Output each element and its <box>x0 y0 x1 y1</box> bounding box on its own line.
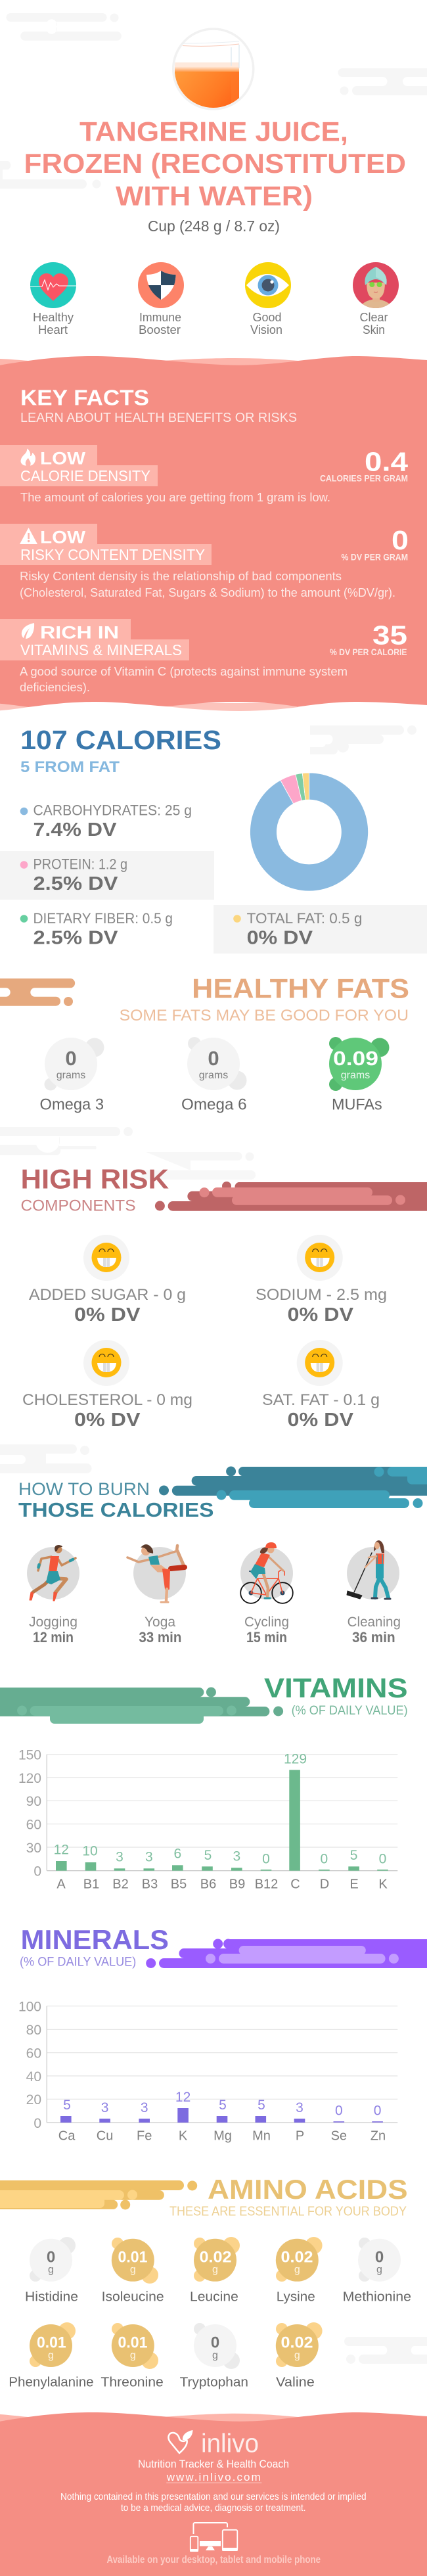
fact: risky content density: LOW <box>40 527 86 547</box>
amino: threonine: 0.01 <box>118 2334 147 2352</box>
benefit: good vision <box>245 262 291 336</box>
bar chart: vitamins: 0 <box>379 1851 386 1866</box>
label: Clear <box>360 311 388 324</box>
bar chart: vitamins: 3 <box>145 1850 153 1865</box>
fat: mufas <box>329 1037 389 1114</box>
bar chart: vitamins: 150 <box>18 1748 41 1762</box>
benefit: clear skin <box>353 262 399 336</box>
bar chart: vitamins: 5 <box>204 1848 212 1863</box>
label: Booster <box>139 323 181 336</box>
serving size: Cup (248 g / 8.7 oz) <box>148 218 280 235</box>
amino: threonine <box>101 2323 164 2390</box>
fat: omega 3: 0 <box>65 1047 77 1070</box>
title: WITH WATER) <box>116 180 313 212</box>
fact: vitamins and minerals: A good source of Vitamin C (protects against immune system <box>20 665 348 678</box>
heading: vitamins: VITAMINS <box>264 1672 408 1703</box>
fat: omega 3: grams <box>56 1070 85 1081</box>
amino: threonine: g <box>130 2350 136 2361</box>
bar chart: minerals: 0 <box>374 2103 381 2118</box>
heading: calories: 107 CALORIES <box>20 725 221 755</box>
amino: phenylalanine: 0.01 <box>37 2334 66 2352</box>
amino: lysine <box>276 2237 323 2305</box>
risk: saturated fat: 0% DV <box>288 1410 354 1431</box>
icon: warning triangle <box>20 528 37 544</box>
exercise: yoga: 33 min <box>139 1629 181 1645</box>
bar chart: vitamins: C <box>290 1877 300 1891</box>
amino: valine <box>276 2322 323 2390</box>
banner: burn <box>159 1467 427 1508</box>
exercise: jogging <box>27 1545 79 1645</box>
legend: dietary fiber: 2.5% DV <box>33 928 118 949</box>
fact: calorie density: 0.4 <box>365 447 408 477</box>
bar chart: minerals: 3 <box>296 2100 303 2115</box>
label <box>250 311 282 336</box>
fact: risky content density: (Cholesterol, Saturated Fat, Sugars & Sodium) to the amount (%DV/gr). <box>20 586 395 599</box>
exercise: cleaning: Cleaning <box>348 1615 401 1630</box>
risk: cholesterol <box>22 1340 192 1431</box>
legend: carbohydrates: 7.4% DV <box>33 819 117 840</box>
heading: minerals <box>20 1924 169 1969</box>
fat: mufas: MUFAs <box>332 1096 382 1114</box>
label <box>360 311 388 336</box>
exercise: cycling: 15 min <box>246 1629 287 1645</box>
legend: total fat: 0% DV <box>247 928 313 949</box>
bar chart: vitamins: E <box>349 1877 359 1891</box>
icon: flame <box>21 448 35 466</box>
bar chart: vitamins: 90 <box>26 1794 41 1809</box>
bar chart: vitamins: 12 <box>54 1843 69 1858</box>
risk: cholesterol: CHOLESTEROL - 0 mg <box>22 1391 192 1409</box>
amino: leucine <box>190 2237 240 2305</box>
amino: leucine: Leucine <box>190 2290 238 2305</box>
chart: macronutrient donut <box>250 773 369 891</box>
bar chart: minerals: Cu <box>97 2129 113 2144</box>
bar chart: minerals: Mn <box>252 2129 271 2144</box>
risk: saturated fat <box>262 1340 380 1431</box>
legend: protein <box>0 851 214 900</box>
benefit: healthy heart <box>30 262 76 336</box>
tagline: Nutrition Tracker & Health Coach <box>138 2458 289 2470</box>
label: Good <box>252 311 281 324</box>
banner: healthy fats <box>0 978 75 1006</box>
risk: sodium <box>256 1235 387 1325</box>
disclaimer <box>60 2491 367 2514</box>
fat: mufas: grams <box>341 1070 370 1081</box>
icon: grinning face <box>305 1243 334 1272</box>
bar chart: vitamins: 30 <box>26 1841 41 1856</box>
amino: leucine: g <box>212 2265 218 2276</box>
bar chart: minerals: 12 <box>175 2090 191 2105</box>
heading: vitamins: (% OF DAILY VALUE) <box>292 1704 408 1718</box>
legend: protein: 2.5% DV <box>33 873 118 894</box>
icon: face with towel <box>353 262 399 310</box>
fat: omega 6: grams <box>199 1070 228 1081</box>
legend: total fat <box>214 905 427 954</box>
amino: threonine: Threonine <box>101 2376 164 2390</box>
bar chart: vitamins <box>18 1748 397 1891</box>
heading: how to burn: HOW TO BURN <box>18 1479 150 1499</box>
legend: carbohydrates <box>20 802 192 840</box>
risk: sodium: 0% DV <box>288 1304 354 1325</box>
risk: cholesterol: 0% DV <box>74 1410 141 1431</box>
amino: methionine: 0 <box>375 2248 384 2266</box>
icon: leaf <box>22 623 34 639</box>
bar chart: minerals: Mg <box>214 2129 232 2144</box>
disclaimer: Nothing contained in this presentation and our services is intended or implied <box>60 2491 367 2502</box>
risk: added sugar: ADDED SUGAR - 0 g <box>29 1286 186 1304</box>
fact: risky content density: % DV PER GRAM <box>342 552 408 563</box>
heading: minerals: MINERALS <box>21 1924 169 1955</box>
bar chart: vitamins: 3 <box>233 1849 240 1864</box>
label: Immune <box>139 311 181 324</box>
fact: calorie density: CALORIES PER GRAM <box>320 473 408 484</box>
icon: yoga pose <box>127 1544 185 1602</box>
icon: shield <box>138 262 184 308</box>
banner dot <box>64 997 73 1006</box>
amino: isoleucine: 0.01 <box>118 2248 147 2266</box>
amino: leucine: 0.02 <box>200 2248 231 2266</box>
fact: vitamins and minerals: 35 <box>372 620 407 651</box>
amino: tryptophan <box>180 2323 248 2390</box>
amino: methionine: Methionine <box>343 2290 411 2305</box>
bar chart: vitamins: 0 <box>34 1864 41 1879</box>
fat: mufas: 0.09 <box>333 1047 378 1070</box>
fact: risky content density <box>0 524 409 599</box>
heading: healthy fats: SOME FATS MAY BE GOOD FOR YOU <box>120 1007 409 1024</box>
exercise: jogging: Jogging <box>29 1615 78 1630</box>
heading: healthy fats: HEALTHY FATS <box>192 973 409 1004</box>
bar chart: minerals: 60 <box>26 2046 41 2061</box>
bar chart: minerals: 3 <box>101 2100 108 2115</box>
fact: risky content density: RISKY CONTENT DENSITY <box>20 546 205 563</box>
bar chart: minerals <box>18 1999 397 2144</box>
title: FROZEN (RECONSTITUTED <box>24 148 406 179</box>
bar chart: minerals: 80 <box>26 2023 41 2038</box>
bar chart: vitamins: B2 <box>112 1877 129 1891</box>
amino: phenylalanine <box>9 2322 94 2390</box>
fact: risky content density: 0 <box>392 525 409 555</box>
banner: minerals <box>146 1939 427 1968</box>
fact: risky content density: Risky Content density is the relationship of bad components <box>20 570 342 583</box>
icon: inlivo heart logo <box>168 2430 193 2453</box>
amino: histidine <box>25 2237 78 2305</box>
fact: calorie density: The amount of calories you are getting from 1 gram is low. <box>20 491 330 504</box>
heading: high risk <box>21 1164 169 1215</box>
bar chart: minerals: Fe <box>137 2129 152 2144</box>
amino: isoleucine: g <box>130 2265 136 2276</box>
bar chart: vitamins: 60 <box>26 1818 41 1832</box>
amino: tryptophan: Tryptophan <box>180 2376 248 2390</box>
amino: methionine <box>343 2238 411 2305</box>
amino: tryptophan: 0 <box>211 2334 219 2352</box>
risk: saturated fat: SAT. FAT - 0.1 g <box>262 1391 380 1409</box>
heading: key facts: KEY FACTS <box>20 385 149 410</box>
heading: key facts <box>20 385 297 425</box>
bar chart: vitamins: 129 <box>284 1751 307 1766</box>
risk: added sugar: 0% DV <box>74 1304 141 1325</box>
risk: added sugar <box>29 1235 186 1325</box>
fact: calorie density: CALORIE DENSITY <box>20 467 150 484</box>
heading: how to burn <box>18 1479 214 1521</box>
bar chart: minerals: 20 <box>26 2092 41 2107</box>
bar chart: minerals: 100 <box>18 1999 41 2015</box>
benefit: immune booster <box>138 262 184 336</box>
risk: sodium: SODIUM - 2.5 mg <box>256 1286 387 1304</box>
exercise: jogging: 12 min <box>33 1629 74 1645</box>
fact: vitamins and minerals: RICH IN <box>40 623 119 643</box>
fact: calorie density: LOW <box>40 448 86 468</box>
bar chart: minerals: 40 <box>26 2069 41 2084</box>
bar chart: vitamins: B6 <box>200 1877 216 1891</box>
bar chart: minerals: 0 <box>335 2103 343 2118</box>
bar chart: minerals: 3 <box>141 2100 148 2115</box>
heading: amino acids: THESE ARE ESSENTIAL FOR YOUR BODY <box>169 2205 407 2219</box>
bar chart: minerals: 5 <box>258 2098 265 2113</box>
amino: valine: 0.02 <box>281 2334 313 2352</box>
bar chart: minerals: K <box>179 2129 188 2144</box>
label: Vision <box>250 323 282 336</box>
bar chart: vitamins: 0 <box>321 1851 328 1866</box>
bar chart: minerals: 0 <box>34 2116 41 2131</box>
bar chart: vitamins: B9 <box>229 1877 245 1891</box>
bar chart: minerals: Zn <box>371 2129 386 2144</box>
bar chart: vitamins: B5 <box>171 1877 187 1891</box>
legend: carbohydrates: CARBOHYDRATES: 25 g <box>33 802 192 819</box>
fact: vitamins and minerals <box>0 619 407 694</box>
availability note: Available on your desktop, tablet and mobile phone <box>106 2554 321 2565</box>
amino: tryptophan: g <box>212 2350 218 2361</box>
heading: key facts: LEARN ABOUT HEALTH BENEFITS OR RISKS <box>20 411 297 425</box>
label <box>33 311 74 336</box>
amino: isoleucine: Isoleucine <box>102 2290 164 2305</box>
bar chart: vitamins: B1 <box>83 1877 99 1891</box>
label: Skin <box>363 323 385 336</box>
logo wordmark: inlivo <box>201 2429 259 2458</box>
bar chart: vitamins: B3 <box>142 1877 158 1891</box>
bar chart: minerals: Ca <box>58 2129 76 2144</box>
label: Healthy <box>33 311 74 324</box>
heading: minerals: (% OF DAILY VALUE) <box>20 1956 136 1969</box>
heading: calories <box>20 725 221 776</box>
amino: phenylalanine: Phenylalanine <box>9 2376 94 2390</box>
amino: methionine: g <box>376 2265 382 2276</box>
amino: histidine: 0 <box>47 2248 55 2266</box>
title: TANGERINE JUICE, <box>79 116 348 147</box>
panel: footer <box>0 2412 427 2576</box>
icon: grinning face <box>92 1243 121 1272</box>
icon: eye <box>245 262 291 308</box>
bar chart: vitamins: 5 <box>350 1848 357 1863</box>
fact: vitamins and minerals: % DV PER CALORIE <box>330 647 407 657</box>
bar chart: vitamins: K <box>378 1877 388 1891</box>
heading: vitamins <box>264 1672 408 1718</box>
bar chart: vitamins: A <box>56 1877 66 1891</box>
fat: omega 3 <box>39 1038 104 1114</box>
heading: healthy fats <box>120 973 409 1024</box>
legend: dietary fiber: DIETARY FIBER: 0.5 g <box>33 910 173 927</box>
bar chart: vitamins: 3 <box>116 1850 124 1865</box>
website link: www.inlivo.com <box>166 2471 261 2483</box>
bar chart: vitamins: D <box>320 1877 329 1891</box>
fat: omega 3: Omega 3 <box>39 1096 104 1114</box>
amino: lysine: 0.02 <box>281 2248 313 2266</box>
heading: calories: 5 FROM FAT <box>20 758 120 776</box>
fat: omega 6: Omega 6 <box>181 1096 247 1114</box>
heading: amino acids <box>169 2174 408 2219</box>
fat: omega 6: 0 <box>208 1047 219 1070</box>
exercise: yoga <box>127 1544 186 1645</box>
amino: lysine: g <box>294 2265 300 2276</box>
heading: high risk: HIGH RISK <box>21 1164 169 1195</box>
bar chart: minerals: 5 <box>63 2098 71 2113</box>
heading: how to burn: THOSE CALORIES <box>18 1498 214 1521</box>
icon: cyclist <box>240 1542 293 1603</box>
icon: person sweeping <box>347 1540 390 1599</box>
bar chart: vitamins: B12 <box>255 1877 278 1891</box>
amino: lysine: Lysine <box>277 2290 315 2305</box>
icon: runner <box>30 1545 76 1601</box>
bar chart: vitamins: 120 <box>18 1771 41 1786</box>
bar chart: vitamins: 10 <box>82 1844 98 1859</box>
icon: heart <box>30 262 76 308</box>
legend: dietary fiber <box>20 910 173 949</box>
fact: calorie density <box>0 445 408 504</box>
icon: grinning face <box>305 1348 334 1377</box>
icon: devices <box>190 2523 238 2552</box>
heading: amino acids: AMINO ACIDS <box>208 2174 408 2205</box>
bar chart: minerals: 5 <box>219 2098 227 2113</box>
amino: isoleucine <box>102 2238 164 2305</box>
legend: protein: PROTEIN: 1.2 g <box>33 856 127 873</box>
fact: vitamins and minerals: deficiencies). <box>20 681 90 694</box>
bar chart: minerals: P <box>296 2129 304 2144</box>
amino: valine: g <box>294 2350 300 2361</box>
heading: high risk: COMPONENTS <box>21 1197 135 1215</box>
banner: amino acids <box>0 2180 197 2209</box>
amino: histidine: Histidine <box>25 2290 78 2305</box>
exercise: cleaning <box>347 1540 401 1645</box>
exercise: cleaning: 36 min <box>352 1629 395 1645</box>
title <box>24 116 406 212</box>
label: Heart <box>38 323 68 336</box>
amino: phenylalanine: g <box>48 2350 54 2361</box>
label <box>139 311 181 336</box>
exercise: yoga: Yoga <box>145 1615 175 1630</box>
exercise: cycling: Cycling <box>244 1615 289 1630</box>
banner: vitamins <box>0 1688 283 1724</box>
disclaimer: to be a medical advice, diagnosis or treatment. <box>121 2502 306 2514</box>
icon: grinning face <box>92 1348 121 1377</box>
exercise: cycling <box>240 1542 293 1645</box>
bar chart: minerals: Se <box>331 2129 347 2144</box>
bar chart: vitamins: 6 <box>173 1847 181 1862</box>
amino: valine: Valine <box>276 2376 315 2390</box>
fact: vitamins and minerals: VITAMINS & MINERALS <box>20 641 182 658</box>
fat: omega 6 <box>181 1037 247 1114</box>
icon: juice glass <box>173 29 254 110</box>
panel: key facts <box>0 356 427 711</box>
legend: total fat: TOTAL FAT: 0.5 g <box>247 910 362 927</box>
amino: histidine: g <box>48 2265 54 2276</box>
bar chart: vitamins: 0 <box>262 1851 270 1866</box>
banner: high risk <box>155 1182 427 1211</box>
